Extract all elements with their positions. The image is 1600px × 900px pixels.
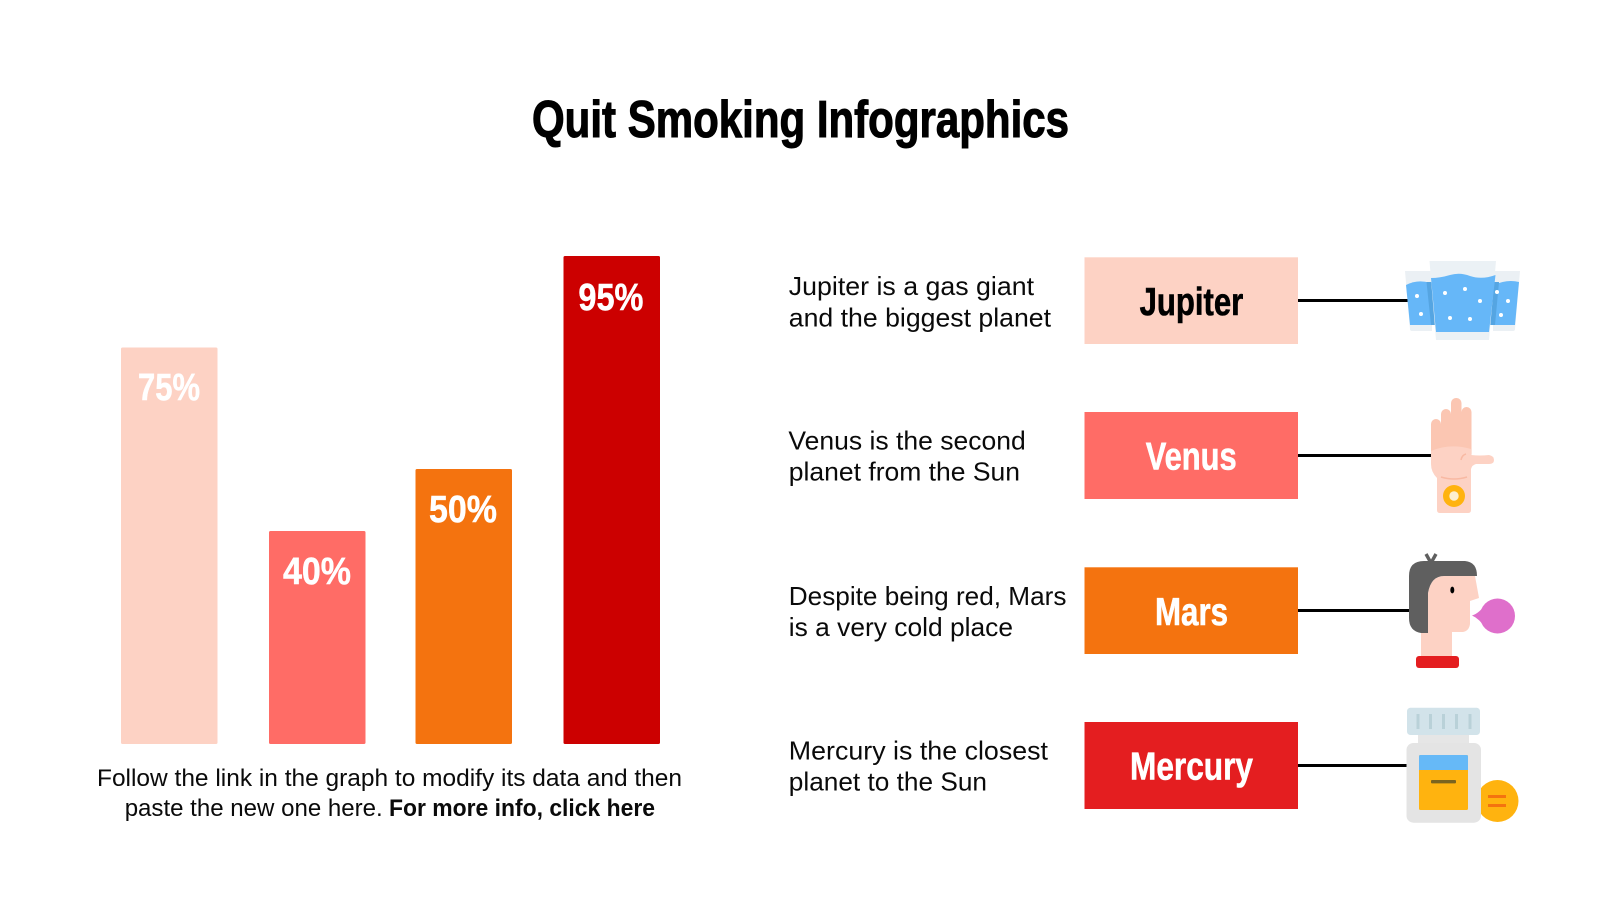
bar chart bbox=[121, 256, 660, 744]
label box: Jupiter: Jupiter bbox=[1140, 281, 1243, 324]
description: Mercury: Mercury is the closest bbox=[789, 735, 1049, 765]
bar: 95%: 95% bbox=[578, 277, 643, 319]
connector: Jupiter bbox=[1298, 299, 1408, 302]
description: Mars: Despite being red, Mars bbox=[789, 581, 1066, 611]
bar: 40%: 40% bbox=[283, 551, 351, 593]
chart caption: For more info, click here bbox=[389, 795, 655, 822]
icon: medicine bottle with pill bbox=[1406, 708, 1518, 823]
description: Venus: Venus is the second bbox=[788, 425, 1026, 455]
label box: Mars: Mars bbox=[1155, 591, 1228, 634]
description: Jupiter: and the biggest planet bbox=[789, 303, 1052, 333]
bar: 95% bbox=[564, 256, 660, 744]
label box: Jupiter bbox=[1084, 257, 1298, 344]
icon: head blowing bubble gum bbox=[1409, 554, 1515, 668]
description: Mars: is a very cold place bbox=[789, 612, 1013, 642]
description: Mercury: planet to the Sun bbox=[789, 767, 987, 797]
row: Mercury bbox=[789, 708, 1518, 823]
label box: Venus bbox=[1084, 412, 1298, 499]
title: Quit Smoking Infographics bbox=[532, 91, 1069, 149]
description: Jupiter bbox=[789, 271, 1052, 333]
icon: glasses of water bbox=[1405, 261, 1520, 340]
label box: Mars bbox=[1084, 567, 1298, 654]
connector: Mercury bbox=[1298, 764, 1408, 767]
description: Mars bbox=[789, 581, 1066, 642]
row: Mars bbox=[789, 554, 1515, 668]
description: Venus: planet from the Sun bbox=[789, 457, 1020, 487]
bar: 40% bbox=[269, 531, 366, 744]
row: Venus bbox=[788, 398, 1494, 513]
label box: Mercury: Mercury bbox=[1130, 745, 1253, 788]
description: Mercury bbox=[789, 735, 1049, 797]
label box: Mercury bbox=[1084, 722, 1298, 809]
chart caption: paste the new one here. bbox=[125, 795, 383, 822]
label box: Venus: Venus bbox=[1146, 435, 1237, 478]
connector: Venus bbox=[1298, 454, 1432, 457]
icon: raised hand with patch bbox=[1431, 398, 1494, 513]
description: Jupiter: Jupiter is a gas giant bbox=[789, 271, 1035, 301]
row: Jupiter bbox=[789, 257, 1520, 344]
bar: 50%: 50% bbox=[429, 489, 497, 531]
chart caption bbox=[97, 765, 682, 822]
bar: 50% bbox=[416, 469, 512, 744]
description: Venus bbox=[788, 425, 1026, 487]
bar: 75%: 75% bbox=[138, 367, 200, 409]
chart caption: Follow the link in the graph to modify its data and then bbox=[97, 765, 682, 792]
bar: 75% bbox=[121, 348, 218, 744]
connector: Mars bbox=[1298, 609, 1410, 612]
